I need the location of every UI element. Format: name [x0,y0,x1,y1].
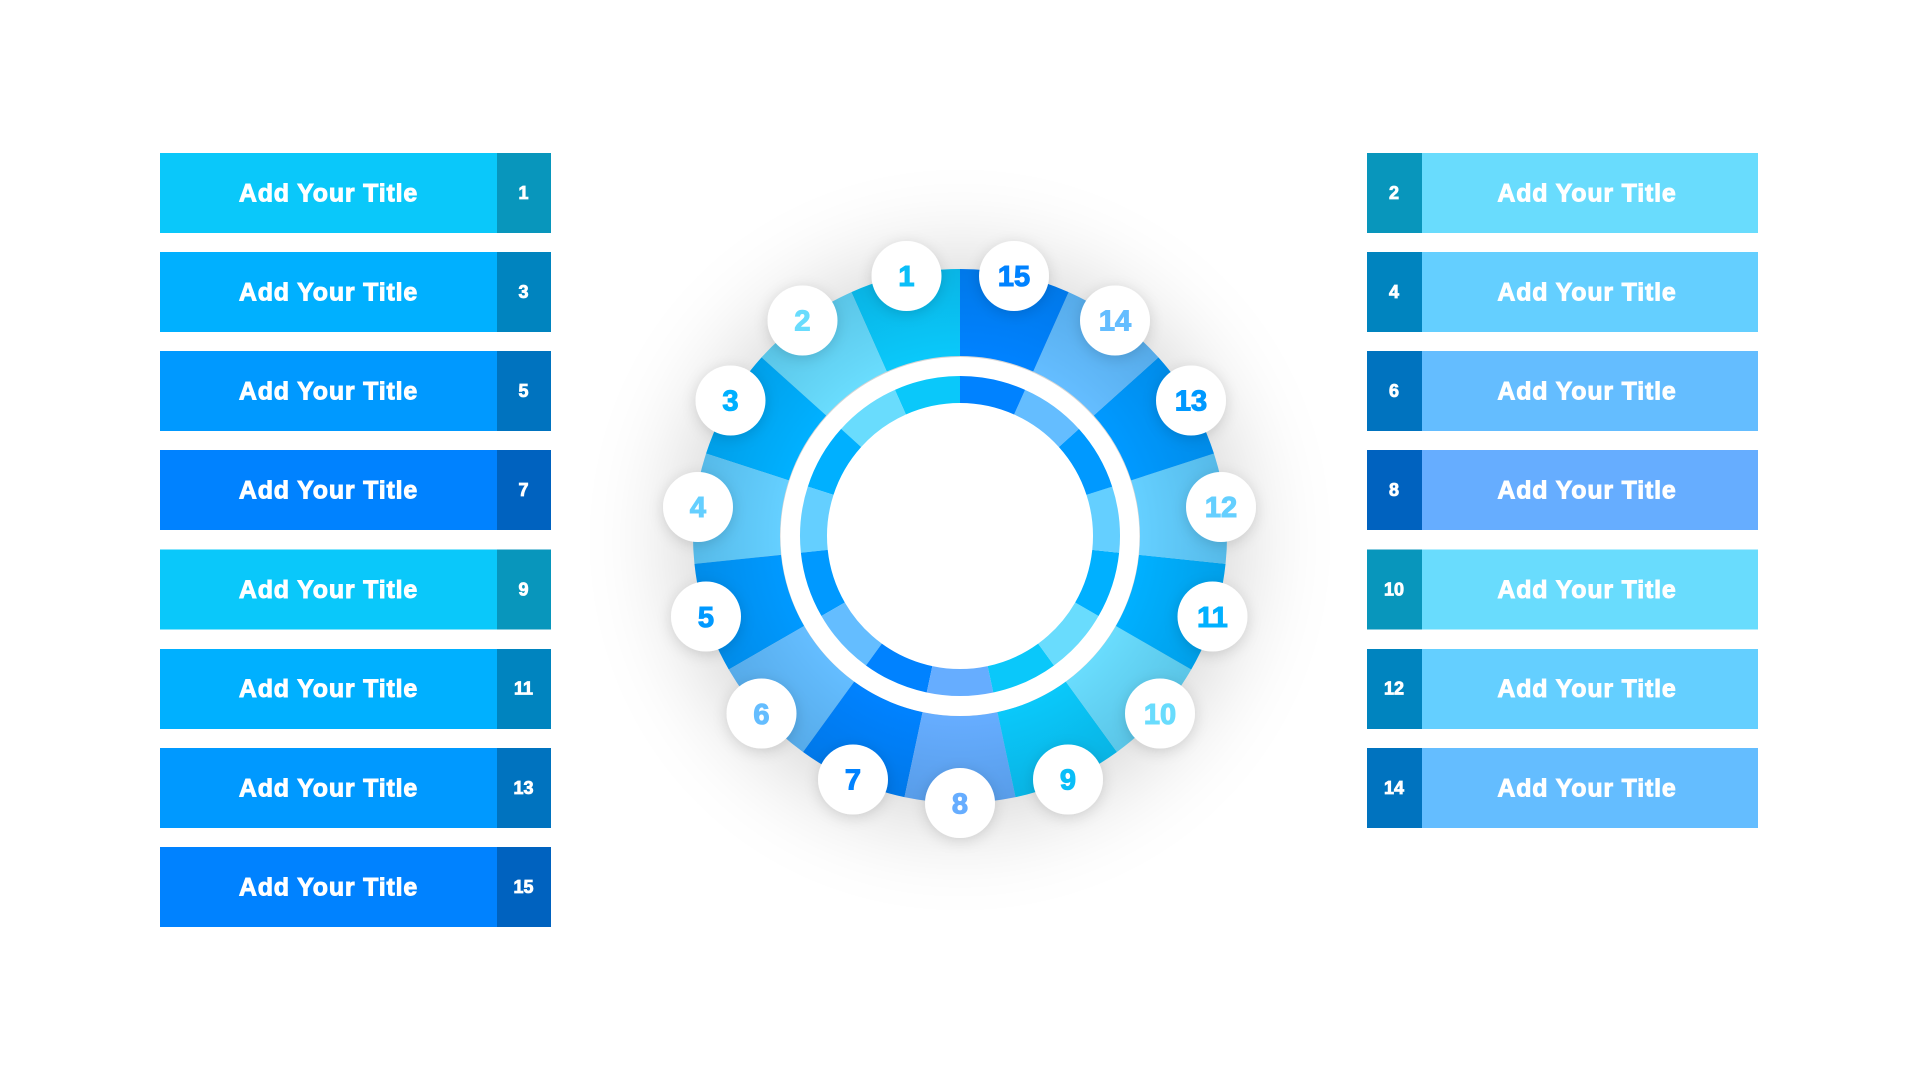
bar 3: Add Your Title [239,278,418,306]
badge 4 [663,472,733,542]
bar 1: 1 [518,183,529,203]
bar 8 [1367,450,1758,530]
bar 6: Add Your Title [1497,378,1677,406]
circular diagram [663,241,1256,838]
badge 11: 11 [1197,602,1228,634]
bar 6 [1367,351,1758,431]
bar 8: 8 [1389,480,1399,500]
badge 4: 4 [690,492,706,524]
bar 2: Add Your Title [1497,180,1677,208]
soft shadow [680,260,1240,820]
bar 1: Add Your Title [239,180,418,208]
badge 2 [768,286,838,356]
badge 15 [979,241,1049,311]
bar 13: 13 [513,778,534,798]
bar 11: Add Your Title [239,675,418,703]
bar 12 [1367,649,1758,729]
badge 3: 3 [722,386,739,418]
right column of title bars [1367,153,1758,828]
bar 14 [1367,748,1758,828]
bar 5: 5 [518,381,529,401]
bar 10: Add Your Title [1497,576,1677,604]
badge 9: 9 [1060,764,1076,796]
bar 4: Add Your Title [1497,278,1677,306]
bar 10: 10 [1384,580,1404,600]
left column of title bars [160,153,551,927]
bar 11: 11 [514,678,533,698]
badge 8 [925,768,995,838]
bar 13: Add Your Title [239,774,418,802]
badge 15: 15 [998,261,1030,293]
bar 7: 7 [518,480,529,500]
bar 9 [160,550,551,630]
bar 5 [160,351,551,431]
bar 4: 4 [1389,282,1399,302]
bar 1 [160,153,551,233]
badge 7 [818,744,888,814]
badge 12 [1186,472,1256,542]
badge 13: 13 [1175,386,1207,418]
bar 2: 2 [1389,183,1399,203]
badge 1: 1 [898,261,915,293]
bar 11 [160,649,551,729]
bar 7: Add Your Title [239,476,418,504]
badge 10 [1125,678,1195,748]
bar 15: Add Your Title [239,874,418,902]
bar 14: 14 [1384,778,1404,798]
bar 13 [160,748,551,828]
badge 11 [1178,582,1248,652]
badge 1 [872,241,942,311]
badge 2: 2 [794,306,811,338]
white centre disc [780,357,1140,716]
inner ring segments [797,373,1123,696]
bar 2 [1367,153,1758,233]
bar 5: Add Your Title [239,378,418,406]
badge 7: 7 [845,764,861,796]
badge 5 [671,582,741,652]
bar 12: 12 [1384,678,1404,698]
badge 6: 6 [753,699,770,731]
badge 8: 8 [952,788,968,820]
outer ring segments [689,263,1231,803]
bar 15 [160,847,551,927]
bar 15: 15 [513,877,534,897]
bar 14: Add Your Title [1497,774,1677,802]
number badges [663,241,1256,838]
bar 4 [1367,252,1758,332]
bar 8: Add Your Title [1497,476,1677,504]
badge 10: 10 [1144,699,1176,731]
bar 12: Add Your Title [1497,675,1677,703]
badge 9 [1033,744,1103,814]
badge 14: 14 [1099,306,1131,338]
bar 9: 9 [518,580,529,600]
bar 3 [160,252,551,332]
badge 5: 5 [698,602,714,634]
bar 6: 6 [1389,381,1399,401]
badge 13 [1156,366,1226,436]
bar 7 [160,450,551,530]
bar 3: 3 [518,282,529,302]
badge 3 [696,366,766,436]
badge 14 [1080,286,1150,356]
bar 9: Add Your Title [239,576,418,604]
bar 10 [1367,550,1758,630]
badge 12: 12 [1205,492,1237,524]
badge 6 [726,678,796,748]
